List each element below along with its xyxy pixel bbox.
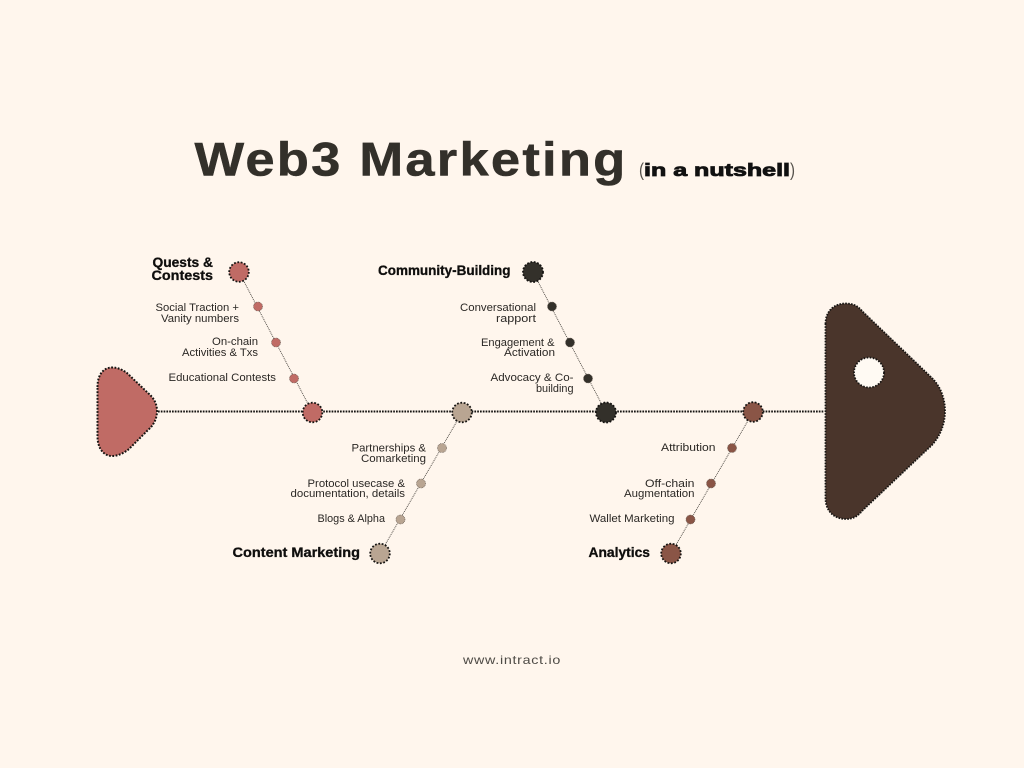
labels: Community items: Conversational (460, 302, 536, 314)
heading: Content Marketing: Content Marketing (232, 545, 360, 560)
branch: Community-Building (378, 262, 616, 422)
labels: Community items: rapport (496, 313, 536, 325)
labels: Content items: Protocol usecase & (308, 478, 406, 490)
title subtitle (639, 160, 795, 180)
heading: Quests & Contests (152, 255, 213, 283)
fish head: brown rounded triangle with eye (826, 304, 945, 519)
title subtitle: ( (639, 160, 644, 180)
heading: Community-Building: Community-Building (378, 263, 510, 278)
heading: Analytics: Analytics (588, 545, 650, 560)
labels: Analytics items: Wallet Marketing (590, 513, 674, 525)
heading: Quests & Contests: Quests & (152, 255, 213, 270)
labels: Analytics items: Off-chain (645, 478, 694, 490)
labels: Content items: Comarketing (361, 453, 426, 465)
labels: Quests items: Social Traction + (156, 302, 239, 314)
labels: Community items: building (536, 383, 574, 395)
labels: Community items (460, 302, 574, 395)
labels: Analytics items (590, 442, 716, 525)
title (194, 134, 795, 186)
labels: Quests items: On-chain (212, 336, 258, 348)
labels: Analytics items: Attribution (661, 442, 716, 454)
labels: Quests items: Educational Contests (168, 372, 277, 384)
labels: Community items: Advocacy & Co- (490, 372, 574, 384)
labels: Quests items: Vanity numbers (161, 313, 240, 325)
icon: eye (854, 358, 884, 388)
fishbone spine (158, 410, 824, 412)
branch: Content Marketing (232, 403, 472, 563)
labels: Community items: Engagement & (481, 337, 555, 349)
title subtitle: ) (790, 160, 795, 180)
branch: Quests & Contests (152, 255, 322, 422)
branch: Analytics (588, 402, 763, 563)
labels: Quests items: Activities & Txs (182, 347, 259, 359)
footer url: www.intract.io (462, 653, 561, 667)
labels: Content items: Blogs & Alpha (318, 513, 386, 525)
title subtitle: in a nutshell (644, 160, 790, 180)
labels: Content items: Partnerships & (352, 442, 427, 454)
labels: Community items: Activation (504, 347, 555, 359)
labels: Analytics items: Augmentation (624, 488, 694, 500)
labels: Quests items (156, 302, 277, 384)
labels: Content items (290, 442, 427, 525)
labels: Content items: documentation, details (290, 488, 406, 500)
title main text: Web3 Marketing (194, 134, 628, 186)
heading: Quests & Contests: Contests (152, 268, 213, 283)
fish tail: red rounded triangle (98, 368, 157, 456)
